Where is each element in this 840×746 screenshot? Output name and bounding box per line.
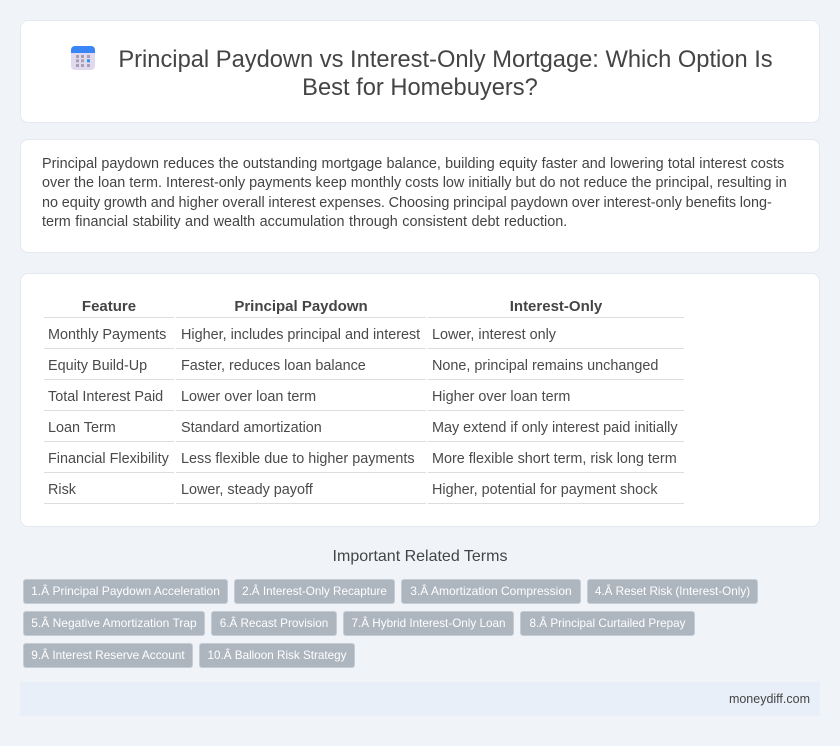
row: monthly payments: Monthly Payments [48, 327, 166, 343]
row: equity build-up: Equity Build-Up [48, 358, 147, 374]
row: financial flexibility [48, 451, 677, 467]
row: total interest paid: Higher over loan term [432, 389, 570, 405]
panel: comparison table card [20, 273, 820, 527]
row: financial flexibility: Financial Flexibility [48, 451, 169, 467]
tag 8: 8.Â Principal Curtailed Prepay [530, 617, 685, 630]
icon: calendar [71, 46, 95, 70]
row: monthly payments: Lower, interest only [432, 327, 556, 343]
tag 10 [199, 643, 355, 668]
footer credit: moneydiff.com [729, 692, 810, 706]
row: equity build-up: None, principal remains unchanged [432, 358, 658, 374]
row: total interest paid: Total Interest Paid [48, 389, 163, 405]
tag 5 [23, 611, 205, 636]
tag 7: 7.Â Hybrid Interest-Only Loan [352, 617, 505, 630]
tag 1 [23, 579, 228, 604]
row: risk: Lower, steady payoff [181, 482, 313, 498]
heading: related terms: Important Related Terms [333, 548, 507, 565]
table header: Principal Paydown [234, 298, 368, 315]
row: total interest paid [48, 389, 570, 405]
tag 2: 2.Â Interest-Only Recapture [242, 585, 387, 598]
row: equity build-up: Faster, reduces loan balance [181, 358, 366, 374]
title line 2: Best for Homebuyers? [302, 75, 538, 101]
tag 3 [401, 579, 581, 604]
row: equity build-up [48, 358, 658, 374]
table header: Feature [82, 298, 136, 315]
tag 9 [23, 643, 193, 668]
related term tags [23, 579, 758, 668]
row: financial flexibility: Less flexible due to higher payments [181, 451, 415, 467]
tag 10: 10.Â Balloon Risk Strategy [207, 649, 347, 662]
tag 6: 6.Â Recast Provision [220, 617, 328, 630]
row: risk [48, 482, 658, 498]
row: financial flexibility: More flexible short term, risk long term [432, 451, 677, 467]
tag 8 [520, 611, 695, 636]
tag 6 [211, 611, 337, 636]
panel: summary card [20, 139, 820, 253]
row: monthly payments [48, 327, 556, 343]
row: loan term: Standard amortization [181, 420, 322, 436]
summary text [42, 156, 787, 230]
panel: title card [20, 20, 820, 123]
row: loan term: Loan Term [48, 420, 116, 436]
row: total interest paid: Lower over loan term [181, 389, 316, 405]
table header: Interest-Only [510, 298, 602, 315]
row: risk: Higher, potential for payment shock [432, 482, 658, 498]
tag 1: 1.Â Principal Paydown Acceleration [31, 584, 220, 598]
table header [82, 298, 602, 315]
tag 4 [587, 579, 758, 604]
row: monthly payments: Higher, includes principal and interest [181, 327, 420, 343]
tag 2 [234, 579, 395, 604]
tag 9: 9.Â Interest Reserve Account [31, 648, 185, 662]
summary text: over the loan term. Interest-only payments keep monthly costs low initially but do not reduce the principal, resulting in [42, 175, 787, 191]
tag 4: 4.Â Reset Risk (Interest-Only) [595, 585, 750, 598]
row: loan term [48, 420, 678, 436]
row: risk: Risk [48, 482, 76, 498]
summary text: Principal paydown reduces the outstanding mortgage balance, building equity faster and lowering total interest costs [42, 156, 784, 172]
summary text: term financial stability and wealth accumulation through consistent debt reduction. [42, 214, 567, 230]
tag 3: 3.Â Amortization Compression [410, 584, 572, 598]
title line 1: Principal Paydown vs Interest-Only Mortgage: Which Option Is [118, 47, 773, 73]
tag 7 [343, 611, 514, 636]
footer bar [20, 682, 820, 716]
row: loan term: May extend if only interest paid initially [432, 420, 678, 436]
summary text: no equity growth and higher overall interest expenses. Choosing principal paydown over interest-only benefits long- [42, 195, 772, 211]
tag 5: 5.Â Negative Amortization Trap [31, 616, 197, 630]
